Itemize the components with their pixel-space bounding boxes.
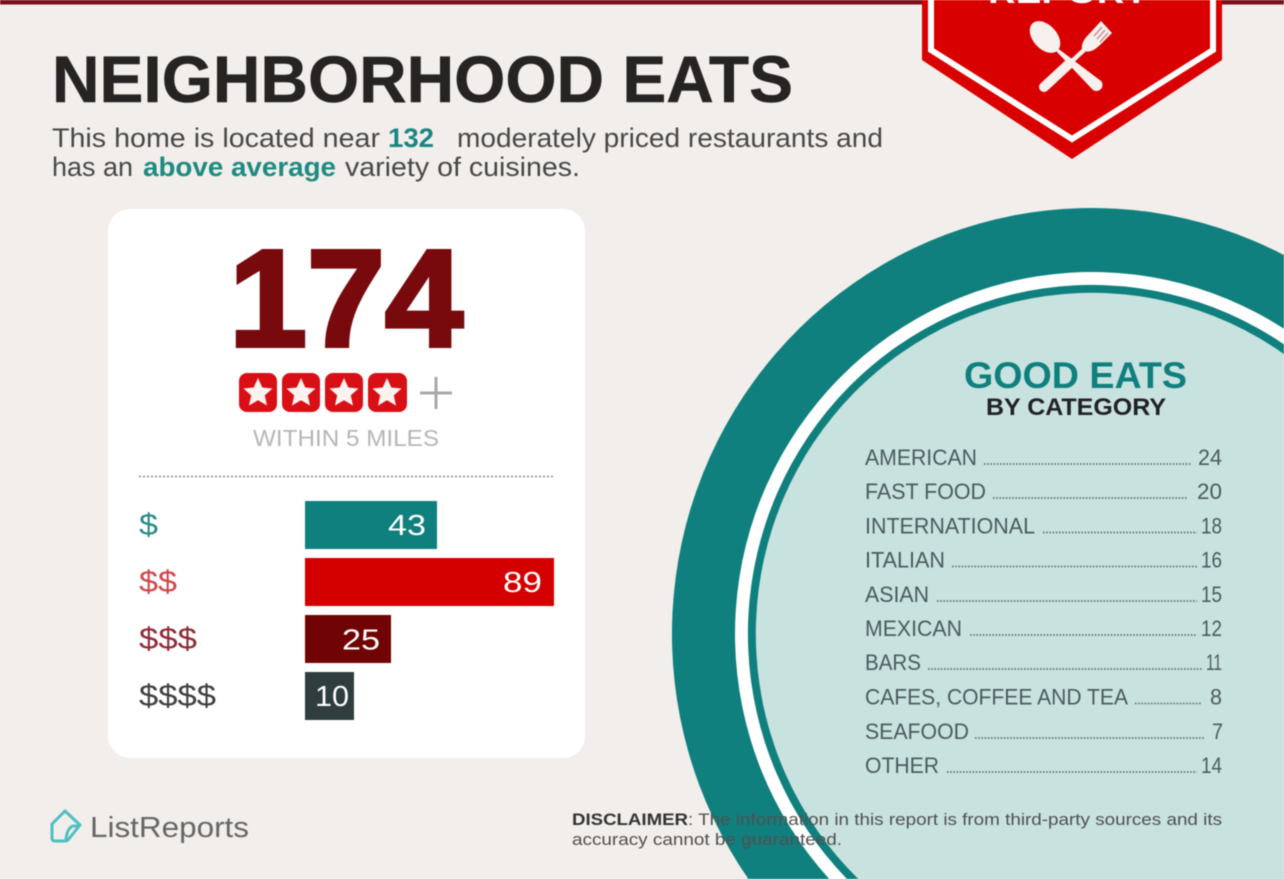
bar: $$: 89 [503, 567, 542, 599]
list: categories: OTHER [865, 753, 939, 778]
list: categories: 11 [1206, 650, 1222, 675]
disclaimer: : The information in this report is from third-party sources and its [688, 810, 1222, 829]
text block: intro: moderately priced restaurants and [457, 123, 883, 153]
disclaimer [572, 810, 1222, 849]
list: categories: 20 [1197, 479, 1222, 504]
list: categories: 24 [1198, 445, 1222, 470]
panel: teal circle [672, 208, 1284, 879]
list: categories: AMERICAN [865, 445, 977, 470]
big number: 174 [229, 222, 463, 376]
list: categories: 18 [1201, 514, 1222, 538]
bar: $$$: $$$ [139, 621, 197, 656]
list: categories: BARS [865, 650, 921, 675]
text block: intro [52, 123, 883, 182]
bar: $$: $$ [139, 564, 177, 599]
list: categories: 12 [1201, 616, 1222, 641]
icon: spoon and fork [1024, 15, 1112, 91]
heading: good eats: GOOD EATS [964, 355, 1187, 396]
text block: intro: 132 [388, 123, 434, 153]
bar: $$$ [139, 615, 391, 663]
list: categories: MEXICAN [865, 616, 962, 641]
panel: restaurant count card [108, 209, 585, 758]
list: categories: ASIAN [865, 582, 929, 607]
icon: house logo [52, 811, 80, 841]
list: categories [865, 445, 1223, 778]
list: categories: 15 [1201, 582, 1222, 607]
top bar [0, 0, 1284, 4]
bar: $$$$: 10 [315, 681, 349, 713]
heading: good eats: BY CATEGORY [986, 394, 1166, 421]
text block: intro: above average [143, 152, 336, 182]
list: categories: CAFES, COFFEE AND TEA [865, 684, 1128, 710]
heading: good eats [964, 355, 1187, 421]
list: categories: 8 [1210, 684, 1222, 710]
list: categories: SEAFOOD [865, 719, 969, 744]
text block: intro: This home is located near [52, 123, 380, 153]
bar: $$$$: $$$$ [139, 678, 216, 713]
within 5 miles label: WITHIN 5 MILES [253, 425, 439, 451]
title: NEIGHBORHOOD EATS [52, 42, 793, 116]
text block: intro: has an [52, 152, 133, 182]
text block: intro: variety of cuisines. [345, 152, 580, 182]
bar: $: $ [139, 507, 158, 542]
disclaimer: accuracy cannot be guaranteed. [572, 830, 842, 849]
badge: report [922, 0, 1222, 159]
bar: $$$$ [139, 672, 354, 720]
logo: ListReports: ListReports [90, 812, 249, 844]
disclaimer: DISCLAIMER [572, 810, 688, 829]
icon: four star rating [239, 373, 407, 412]
icon: plus [420, 377, 452, 409]
bar: $$ [139, 558, 554, 606]
list: categories: 16 [1201, 548, 1222, 572]
list: categories: 7 [1212, 719, 1223, 744]
list: categories: FAST FOOD [865, 479, 986, 504]
list: categories: ITALIAN [865, 548, 945, 572]
list: categories: 14 [1201, 753, 1222, 778]
bar: $: 43 [388, 510, 426, 542]
bar: $ [139, 501, 437, 549]
bar: $$$: 25 [342, 624, 380, 656]
bar chart: price tiers [139, 501, 554, 720]
list: categories: INTERNATIONAL [865, 514, 1035, 538]
